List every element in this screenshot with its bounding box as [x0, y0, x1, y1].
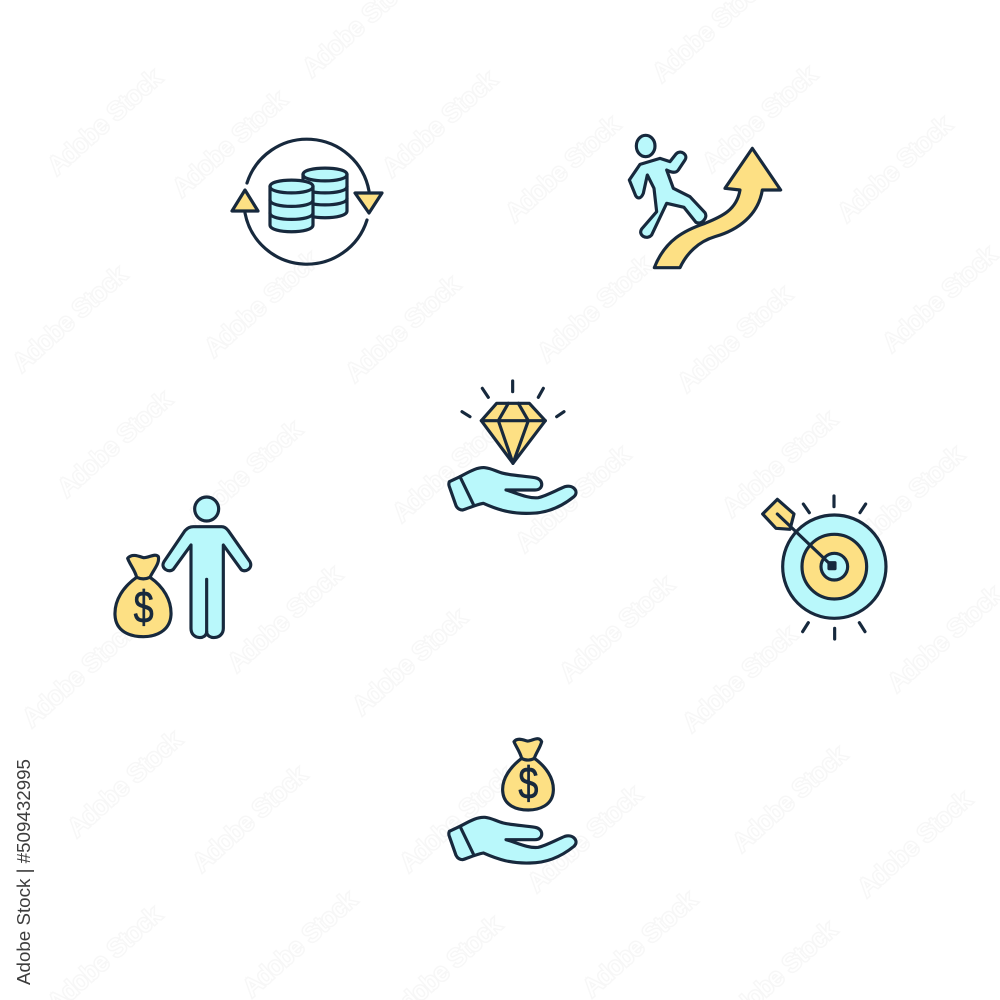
arrow head left [232, 190, 258, 211]
watermark pattern: Adobe Stock [853, 786, 977, 902]
watermark pattern: Adobe Stock [578, 886, 702, 1000]
sparkle rays [803, 496, 866, 639]
watermark pattern: Adobe Stock [678, 621, 802, 737]
bag shape [503, 739, 553, 810]
watermark pattern: Adobe Stock [718, 406, 842, 522]
watermark pattern: Adobe Stock [183, 416, 307, 532]
icon: person with money bag [115, 497, 251, 638]
watermark pattern: Adobe Stock [845, 441, 969, 557]
rising arrow [654, 148, 781, 268]
watermark pattern: Adobe Stock [63, 726, 187, 842]
icon: target with arrow [763, 496, 886, 639]
watermark pattern: Adobe Stock [833, 111, 957, 227]
watermark pattern: Adobe Stock [18, 616, 142, 732]
arrow tip [829, 563, 835, 569]
watermark pattern: Adobe Stock [395, 761, 519, 877]
runner body [629, 152, 706, 237]
watermark pattern: Adobe Stock [53, 386, 177, 502]
watermark pattern: Adobe Stock [878, 241, 1000, 357]
diamond [481, 403, 545, 463]
watermark pattern: Adobe Stock [501, 111, 625, 227]
icon: coins with circular arrows [232, 139, 382, 264]
watermark pattern: Adobe Stock [523, 781, 647, 897]
money bag above hand [503, 739, 553, 810]
watermark pattern: Adobe Stock [8, 261, 132, 377]
runner head [636, 135, 655, 157]
watermark pattern: Adobe Stock [188, 761, 312, 877]
watermark pattern: Adobe Stock [511, 441, 635, 557]
coin stack left [270, 180, 313, 232]
open hand [449, 817, 576, 863]
person head [195, 497, 219, 521]
watermark pattern: Adobe Stock [348, 604, 472, 720]
watermark pattern: Adobe Stock [378, 66, 502, 182]
dollar sign: $ [518, 757, 538, 808]
money bag [115, 555, 171, 637]
watermark pattern: Adobe Stock [555, 571, 679, 687]
arrow head right [355, 193, 382, 213]
person body [163, 527, 251, 638]
watermark pattern: Adobe Stock [728, 741, 852, 857]
hand cuff line [460, 826, 473, 854]
inner ring [821, 553, 848, 580]
middle ring [802, 534, 867, 599]
stock credit text: Adobe Stock | #509432995 [14, 759, 34, 985]
arrow fletching [763, 499, 794, 529]
icon: runner climbing rising arrow [629, 135, 781, 268]
arrow shaft [777, 514, 832, 566]
watermark pattern: Adobe Stock [673, 281, 797, 397]
watermark pattern: Adobe Stock [341, 271, 465, 387]
open hand [449, 468, 576, 513]
watermark pattern: Adobe Stock [388, 411, 512, 527]
outer ring [783, 515, 886, 618]
watermark pattern: Adobe Stock [533, 251, 657, 367]
sparkle rays [462, 381, 564, 417]
circular arrow arcs [245, 139, 369, 264]
watermark pattern: Adobe Stock [238, 886, 362, 1000]
icon: money bag over open hand [449, 817, 576, 863]
watermark pattern: Adobe Stock [43, 64, 167, 180]
watermark pattern: Adobe Stock [168, 86, 292, 202]
dollar sign: $ [134, 581, 154, 632]
icon: diamond over open hand [449, 381, 576, 513]
watermark pattern: Adobe Stock [200, 246, 324, 362]
watermark pattern: Adobe Stock [223, 561, 347, 677]
coin stack right [303, 168, 347, 218]
watermark pattern: Adobe Stock [698, 61, 822, 177]
